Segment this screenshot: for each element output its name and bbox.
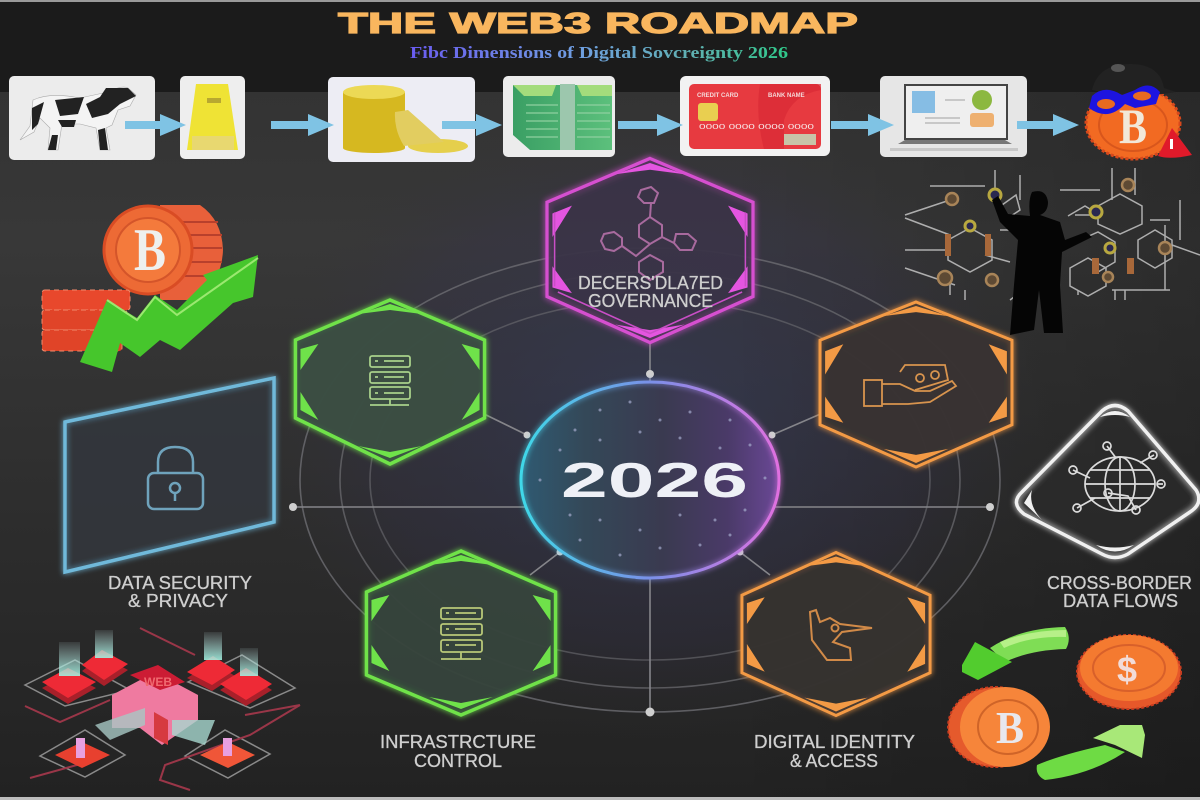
hexagon: identity orange [742,552,930,716]
label: data security: DATA SECURITY [108,573,252,593]
icon: padlock [148,447,203,509]
process flow: gold coins box [328,77,475,162]
icon: hacker bitcoin coin [1086,64,1192,159]
icon: rising bitcoin coins [42,205,258,372]
label: identity [754,732,915,771]
icon: coin exchange [948,627,1181,780]
icon: rising bitcoin coins: B [134,217,166,283]
icon: web3 data center [25,628,300,790]
hexagon: server green upper [295,300,485,464]
label: data security: & PRIVACY [128,591,228,611]
arrows between steps [125,114,1079,136]
process flow: credit card box: 0000 0000 0000 0000 [699,122,814,131]
icon: molecule network [601,187,696,280]
icon: server stack [370,356,410,405]
process flow: gold bag box [180,76,245,159]
panel: cross-border diamond [1016,406,1199,558]
label: cross-border: CROSS-BORDER [1047,573,1192,593]
process flow: laptop box [880,76,1027,157]
label: decentralized governance: GOVERNANCE [588,291,713,311]
icon: hacker bitcoin coin: B [1119,98,1147,154]
process flow: credit card box [680,76,830,156]
globe 2026 [521,382,779,578]
icon: hand holding money [864,365,956,406]
icon: hand holding key [810,610,872,660]
process flow: cow box [9,76,155,160]
orbit rings and connectors [289,248,1000,716]
label: cross-border [1047,573,1192,611]
icon: coin exchange: $ [1117,649,1137,690]
panel: data security screen [65,378,274,572]
process flow: credit card box: BANK NAME [768,93,805,99]
hexagon: infrastructure green lower [366,551,556,715]
label: decentralized governance: DECERS'DLA7ED [578,273,723,293]
icon: person and network [905,168,1200,335]
hexagon: finance orange [820,302,1012,467]
icon: globe network [1069,442,1165,514]
icon: coin exchange: B [996,702,1024,753]
label: infrastructure: INFRASTRCTURE [380,732,536,752]
label: infrastructure [380,732,536,771]
label: decentralized governance [578,273,723,311]
label: cross-border: DATA FLOWS [1063,591,1178,611]
label: data security [108,573,252,611]
subtitle: Fibc Dimensions of Digital Sovcreignty 2026 [410,43,788,62]
year text: 2026 [561,454,748,508]
title: THE WEB3 ROADMAP [338,8,858,40]
icon: server stack lower [441,608,482,659]
label: infrastructure: CONTROL [414,751,502,771]
label: identity: DIGITAL IDENTITY [754,732,915,752]
label: identity: & ACCESS [790,751,878,771]
hexagon: decentralized governance [547,158,753,343]
process flow: credit card box: CREDIT CARD [697,93,739,99]
icon: web3 data center: WEB [144,675,172,689]
process flow: cash stack box [503,76,615,157]
